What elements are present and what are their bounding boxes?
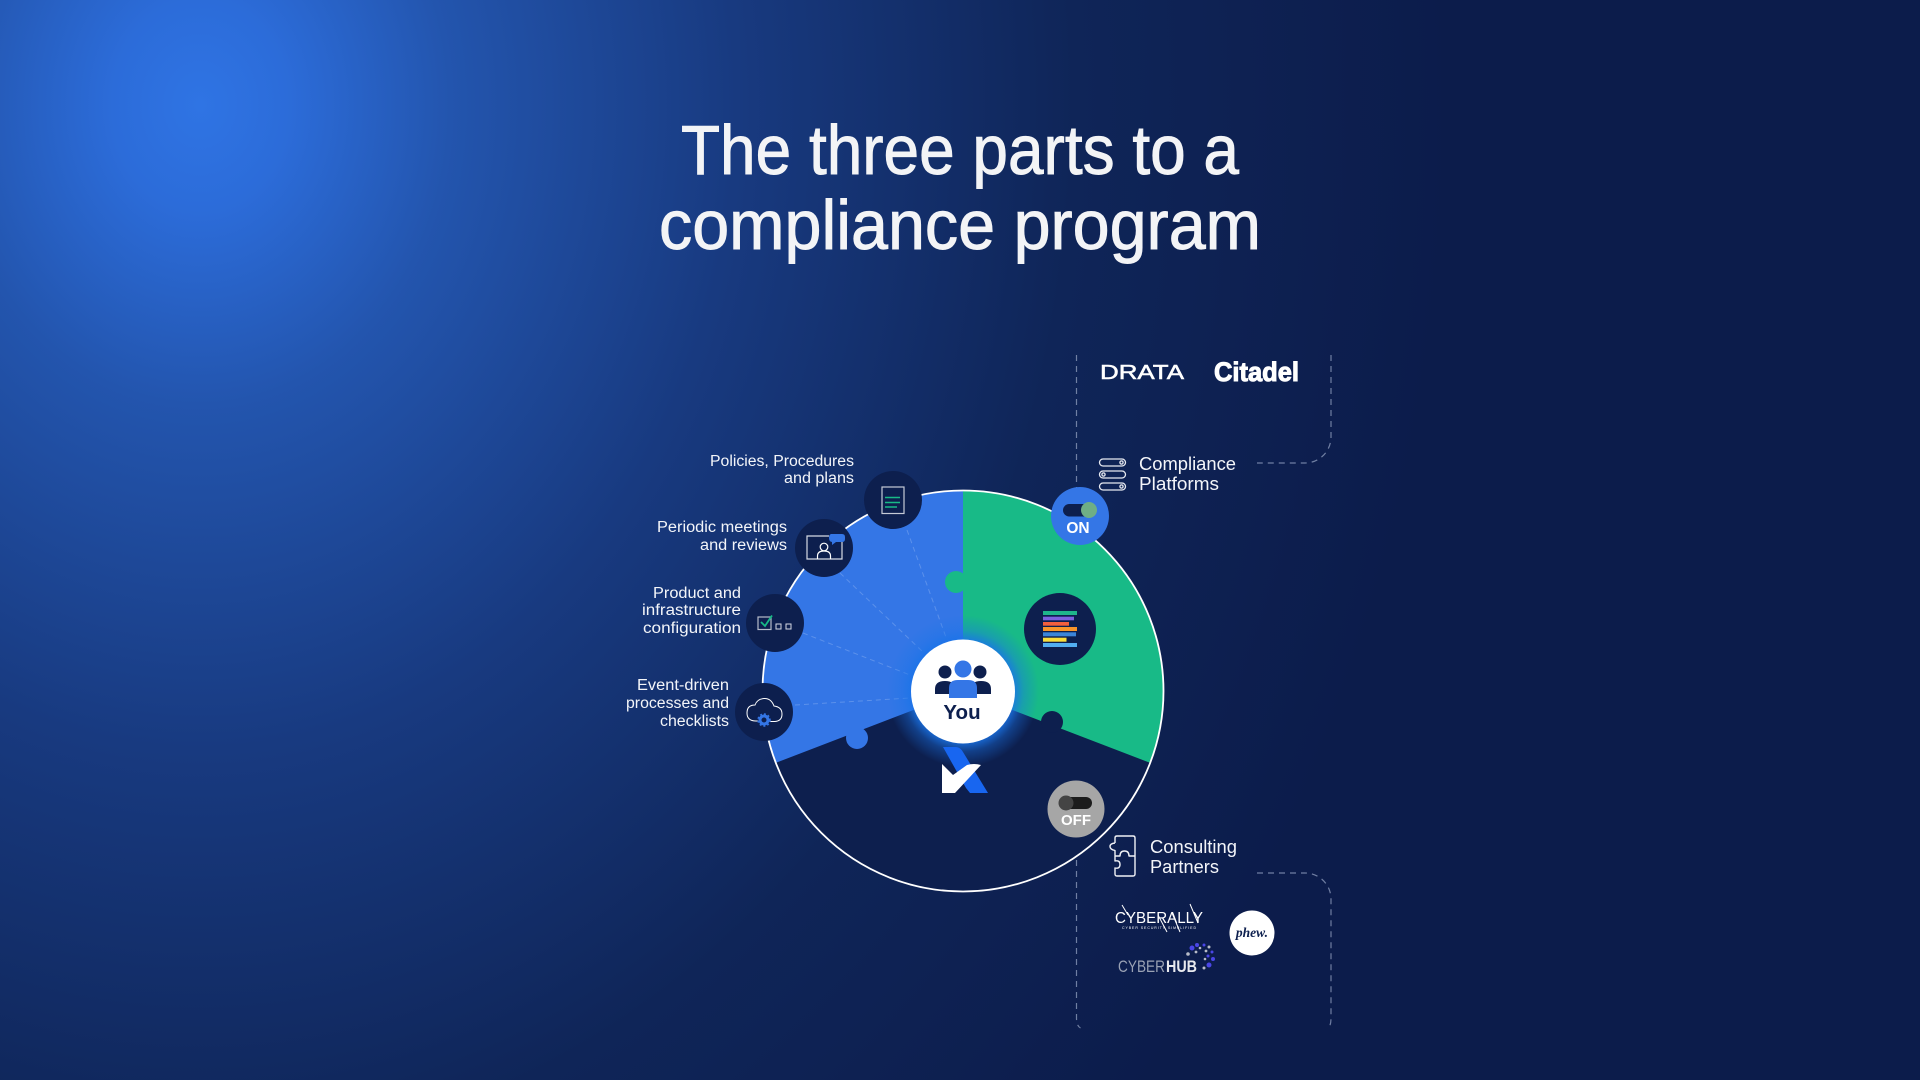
toggle: OFF <box>1048 780 1104 838</box>
label: meetings <box>657 519 787 554</box>
segment: blue policies <box>762 490 963 763</box>
label: product <box>642 585 741 637</box>
spoke lines <box>795 530 947 705</box>
logo: CyberHub <box>1118 943 1215 976</box>
logo: CyberAlly: CYBERALLY <box>1115 910 1203 927</box>
title: The three parts to a <box>681 111 1239 189</box>
logo: Phew <box>1230 910 1274 956</box>
title <box>659 111 1261 264</box>
segment: dark consulting <box>762 490 1164 892</box>
label: event: Event-driven <box>637 677 729 694</box>
you hub: You <box>943 701 981 724</box>
label: policies: and plans <box>784 470 854 487</box>
label: event: checklists <box>660 713 729 730</box>
labels: blue segment items <box>626 453 854 730</box>
logo: CyberAlly: CYBER SECURITY SIMPLIFIED <box>1122 926 1196 930</box>
label: compliance platforms: Platforms <box>1139 474 1219 494</box>
logo: CyberAlly <box>1115 904 1203 932</box>
icon: server stack <box>1100 459 1126 490</box>
icon: puzzle <box>1110 836 1135 876</box>
icon: bars timeline <box>1024 593 1096 665</box>
icon: policies document <box>864 471 922 529</box>
wheel outline <box>762 490 1164 892</box>
label: policies <box>710 453 854 487</box>
label: consulting partners <box>1150 837 1237 877</box>
center glow <box>894 618 1036 764</box>
dashed connector: compliance platforms bracket <box>1076 355 1331 488</box>
icon: event cloud gear <box>735 683 793 741</box>
logo: Citadel: Citadel <box>1214 357 1299 387</box>
dashed connector: consulting partners bracket <box>1076 838 1331 1028</box>
label: product: Product and <box>653 585 741 602</box>
title: compliance program <box>659 186 1261 264</box>
label: compliance platforms <box>1139 454 1236 494</box>
label: policies: Policies, Procedures <box>710 453 854 470</box>
toggle: ON: ON <box>1066 520 1090 537</box>
label: meetings: and reviews <box>700 537 787 554</box>
logo: Phew: phew. <box>1235 925 1268 940</box>
label: event: processes and <box>626 695 729 712</box>
icon: product checkboxes <box>746 594 804 652</box>
label: product: configuration <box>643 620 741 637</box>
label: meetings: Periodic meetings <box>657 519 787 536</box>
label: event <box>626 677 729 730</box>
logo: Drata: DRATA <box>1100 362 1185 384</box>
icon: people <box>935 660 991 698</box>
icon: meetings video <box>795 519 853 577</box>
logo: CyberHub: HUB <box>1166 958 1197 976</box>
you hub <box>911 640 1015 744</box>
toggle: ON <box>1051 487 1109 545</box>
dark puzzle tab <box>1041 711 1063 733</box>
icon: logo mark <box>942 747 988 793</box>
logo: CyberHub: CYBER <box>1118 958 1165 976</box>
label: product: infrastructure <box>642 602 741 619</box>
label: consulting partners: Partners <box>1150 857 1219 877</box>
wheel diagram <box>762 490 1164 892</box>
label: consulting partners: Consulting <box>1150 837 1237 857</box>
toggle: OFF: OFF <box>1061 813 1091 829</box>
label: compliance platforms: Compliance <box>1139 454 1236 474</box>
segment: green platforms <box>945 490 1164 763</box>
